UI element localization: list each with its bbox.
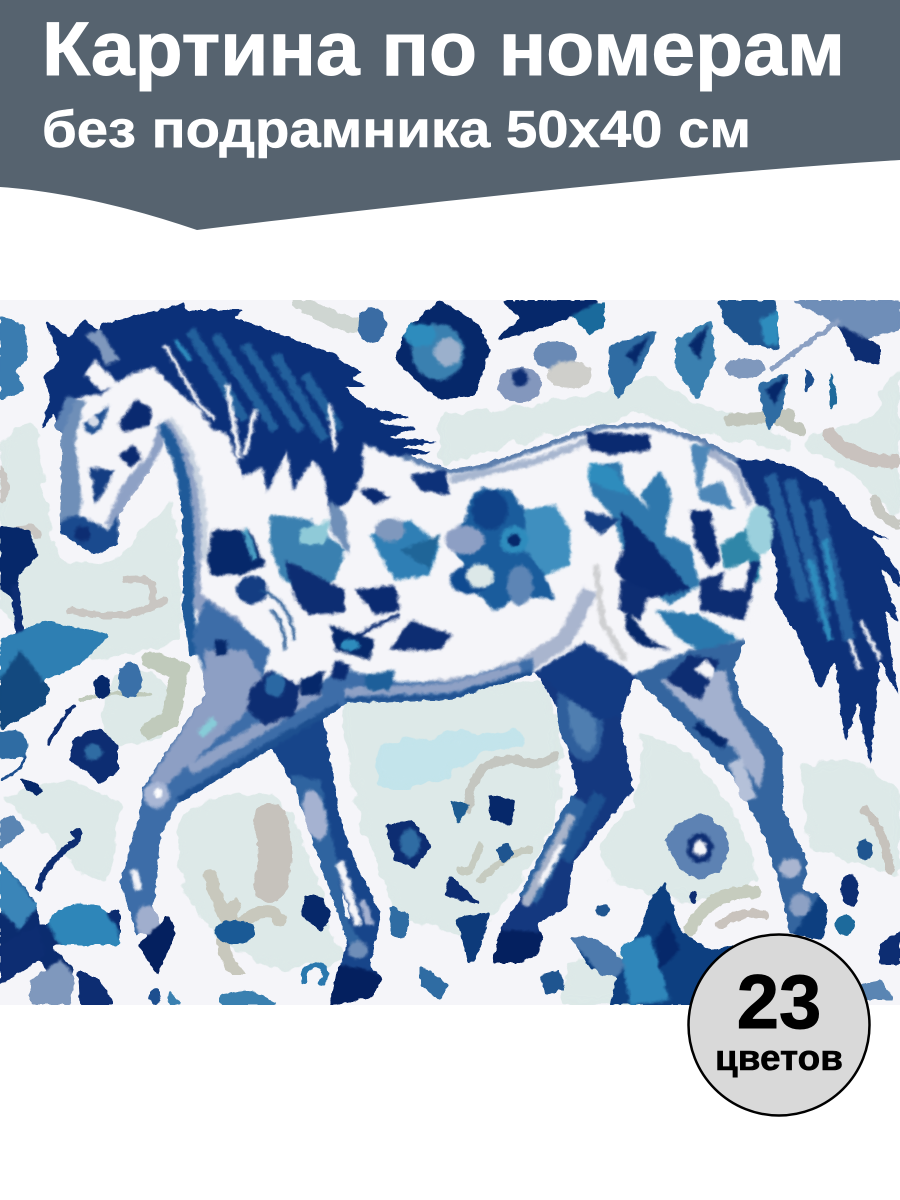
pale blue patches	[375, 728, 525, 790]
face markings	[60, 400, 163, 555]
near front leg	[120, 600, 533, 975]
painting: blue floral horse	[0, 300, 900, 1005]
body	[60, 340, 770, 720]
near hind leg	[633, 640, 828, 940]
neck shading	[168, 420, 203, 560]
heading: Картина по номерам	[42, 7, 845, 92]
belly shading	[420, 590, 590, 690]
small blue blob top	[358, 307, 386, 343]
background flowers and leaves	[0, 300, 900, 1005]
badge caption: цветов	[715, 1037, 843, 1078]
tail	[735, 459, 900, 770]
left edge flowers	[0, 315, 110, 850]
dark small flowers mid-left	[70, 662, 142, 785]
big flower on flank	[445, 488, 570, 612]
floral pattern on shoulder	[207, 470, 452, 725]
colour count badge	[688, 934, 870, 1116]
subheading: без подрамника 50х40 см	[42, 101, 751, 159]
title banner	[0, 0, 900, 230]
taupe and sage swirls	[0, 300, 900, 975]
floral pattern on haunch	[585, 432, 773, 745]
middle-bottom flowers	[149, 795, 515, 1005]
lily bottom centre	[570, 882, 740, 1005]
large corner lily	[0, 831, 280, 1005]
back line shading	[370, 425, 740, 472]
pale background patches	[0, 371, 900, 1005]
small flower lower right	[665, 812, 730, 880]
top leaves	[495, 300, 900, 432]
far front leg	[270, 715, 382, 1005]
horse	[0, 300, 900, 1005]
number of colours: 23	[737, 960, 821, 1045]
mane	[40, 303, 447, 513]
right edge dots	[540, 840, 900, 1000]
far hind leg	[492, 665, 640, 963]
greyish cluster	[498, 341, 592, 403]
flower top centre-left	[395, 300, 490, 400]
